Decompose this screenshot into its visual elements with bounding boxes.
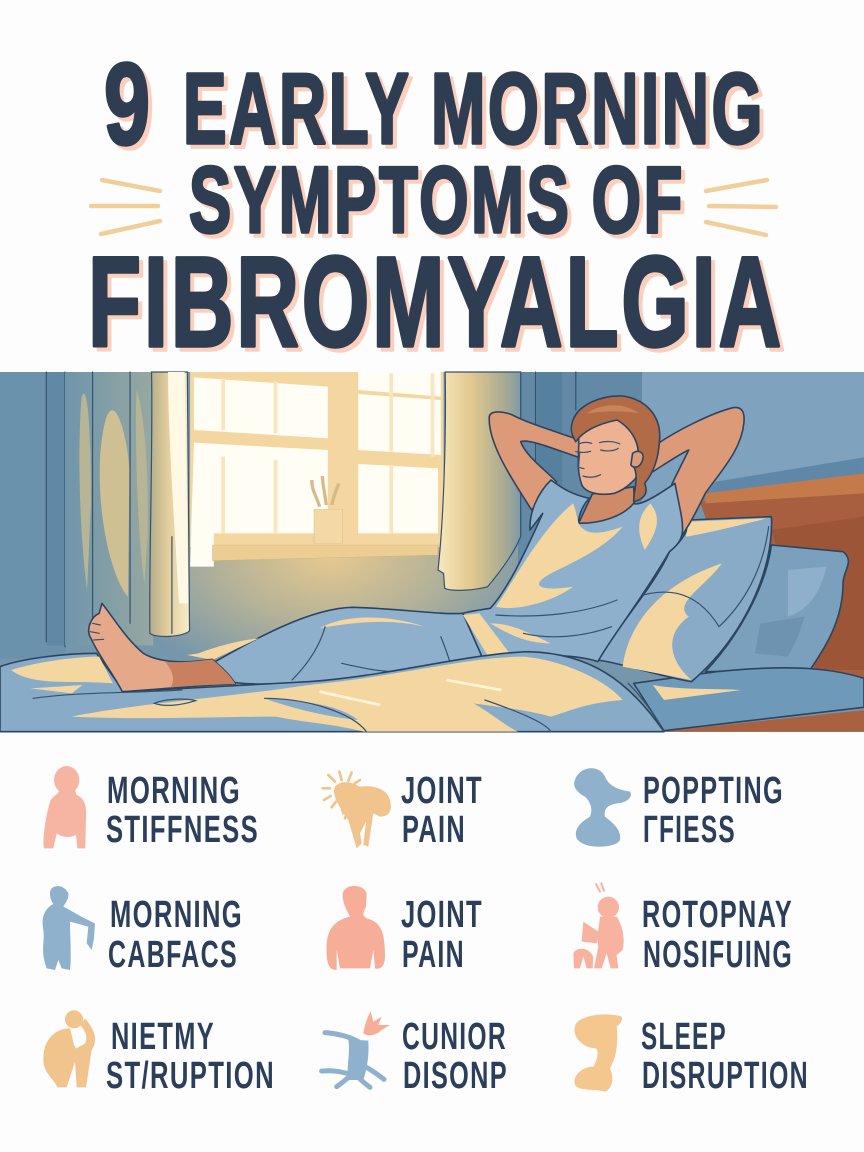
back pillow bbox=[705, 545, 848, 672]
label: MORNING bbox=[107, 770, 241, 812]
label: CABFACS bbox=[108, 934, 238, 976]
symptom: sleep disruption bbox=[574, 1014, 809, 1097]
label: JOINT bbox=[401, 770, 483, 812]
symptom: joint pain (top) bbox=[323, 770, 483, 851]
left arm bbox=[489, 412, 584, 510]
symptom: rotopnay nosifuing bbox=[573, 883, 793, 976]
t-shirt bbox=[463, 480, 683, 663]
window sill bbox=[213, 545, 438, 561]
icon: pink torso front bbox=[327, 886, 385, 970]
label: PAIN bbox=[402, 934, 465, 976]
icon: blue bust bbox=[574, 768, 631, 847]
left dark curtain bbox=[0, 372, 66, 659]
label: ST/RUPTION bbox=[106, 1055, 275, 1097]
icon: left sunburst lines bbox=[91, 180, 160, 234]
bed blanket bbox=[0, 638, 664, 732]
wall bbox=[0, 372, 864, 732]
label: NIETMY bbox=[111, 1016, 215, 1058]
label: ROTOPNAY bbox=[642, 894, 793, 936]
label: ΓFIESS bbox=[643, 809, 736, 851]
window muntins bbox=[223, 373, 433, 533]
icon: right sunburst lines bbox=[706, 180, 776, 235]
icon: pink kneeling figure bbox=[573, 883, 624, 968]
window frame bbox=[190, 372, 444, 547]
label: CUNIOR bbox=[402, 1016, 507, 1058]
foot bbox=[89, 603, 235, 692]
label: JOINT bbox=[401, 894, 483, 936]
symptom: cunior disonp bbox=[322, 1012, 508, 1097]
mattress and bed frame bbox=[634, 668, 864, 732]
left sheer curtain bbox=[65, 372, 190, 645]
right dark curtain bbox=[518, 372, 642, 605]
title line 1 numeral: 9 bbox=[104, 39, 150, 169]
symptom: nietmy struption bbox=[43, 1010, 275, 1097]
title bbox=[88, 39, 784, 374]
neck bbox=[579, 487, 635, 524]
icon: blue splayed shape with pink hand bbox=[322, 1012, 390, 1087]
symptom: joint pain (middle) bbox=[327, 886, 483, 976]
face bbox=[576, 420, 647, 494]
label: POPPTING bbox=[643, 770, 784, 812]
hair bbox=[571, 396, 660, 502]
illustration: woman stretching in bed by a sunlit window bbox=[0, 372, 864, 732]
vase and stems on the sill bbox=[312, 476, 343, 543]
icon: blue figure with arm out bbox=[43, 886, 95, 970]
pants bbox=[212, 607, 510, 684]
label: MORNING bbox=[110, 894, 243, 936]
front pillow bbox=[598, 517, 772, 682]
right arm bbox=[650, 407, 744, 552]
label: STIFFNESS bbox=[106, 809, 259, 851]
label: PAIN bbox=[402, 809, 466, 851]
symptom: morning stiffness bbox=[43, 766, 259, 851]
headboard bbox=[700, 473, 864, 703]
right wall bbox=[642, 372, 864, 503]
icon: pink torso bbox=[43, 766, 86, 848]
icon: tan curled figure bbox=[43, 1010, 95, 1087]
symptom: popping bbox=[574, 768, 784, 851]
symptom: morning cabfacs bbox=[43, 886, 243, 976]
label: SLEEP bbox=[641, 1016, 727, 1058]
label: DISONP bbox=[403, 1055, 508, 1097]
icon: bent figure with rays bbox=[323, 772, 391, 848]
icon: tan seated silhouette bbox=[574, 1014, 622, 1092]
window panes bbox=[190, 372, 441, 567]
right sheer curtain bbox=[438, 372, 521, 590]
